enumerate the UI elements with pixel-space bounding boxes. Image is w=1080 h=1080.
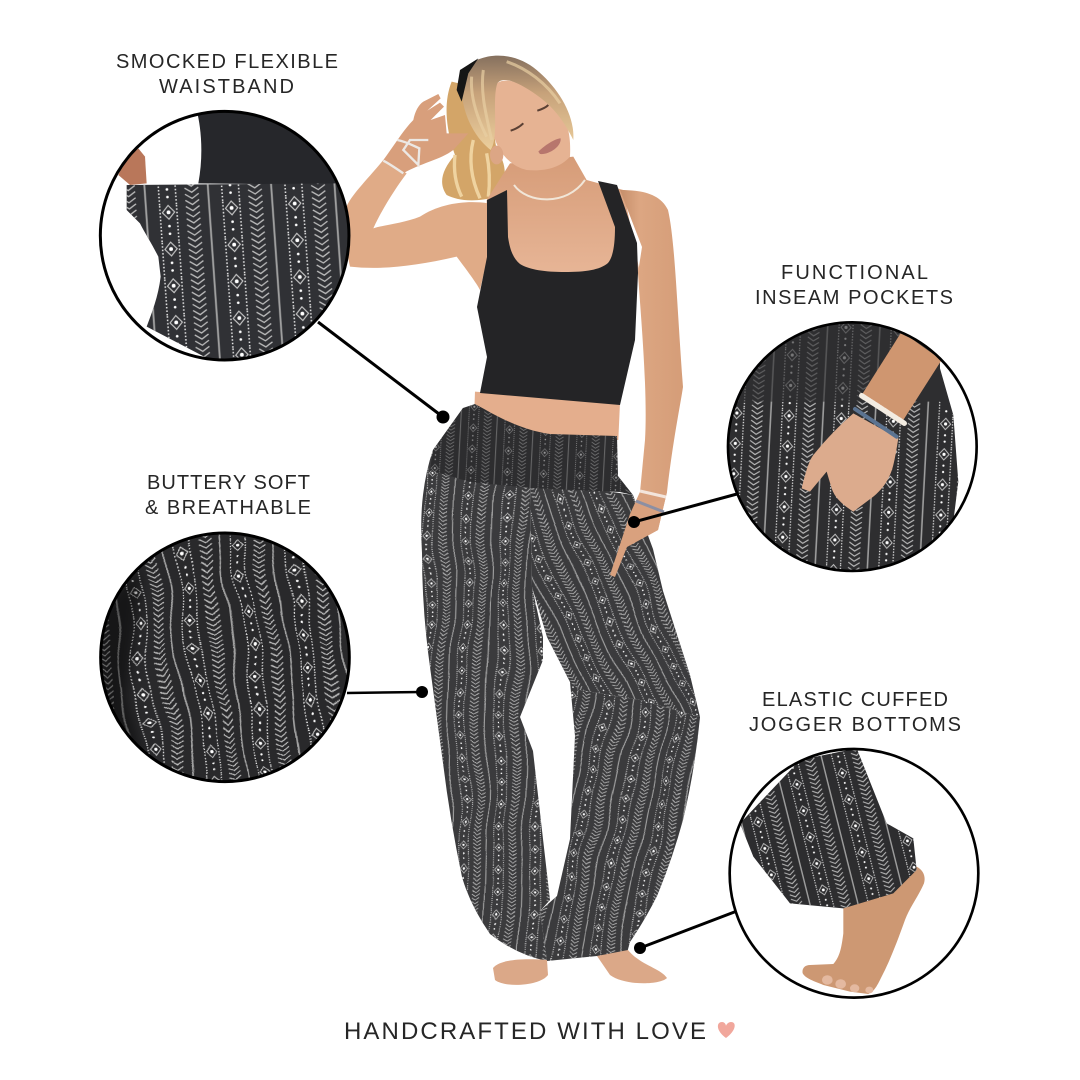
- pants right thigh print: [530, 488, 698, 716]
- cuff fabric print: [740, 748, 917, 908]
- black shirt in detail: [198, 112, 336, 184]
- heading: functional inseam pockets: INSEAM POCKETS: [755, 287, 953, 309]
- smocked waistband: [430, 404, 633, 495]
- hand in pocket: [610, 492, 667, 577]
- forearm: [862, 332, 942, 420]
- heading: elastic cuffed jogger bottoms: [749, 689, 961, 736]
- head: [457, 56, 585, 199]
- circle: waistband detail: [98, 110, 350, 362]
- smocked band print: [738, 324, 900, 402]
- waistband fabric print: [127, 183, 353, 367]
- heading: smocked flexible waistband: [116, 51, 338, 98]
- heading: smocked flexible waistband: SMOCKED FLEXIBLE: [116, 51, 338, 73]
- pants right thigh: [530, 480, 700, 717]
- waistband fabric base: [127, 183, 353, 367]
- pocket fabric print: [729, 402, 958, 570]
- heading: elastic cuffed jogger bottoms: JOGGER BOTTOMS: [749, 714, 961, 736]
- bracelets: [636, 491, 666, 512]
- heading: buttery soft and breathable: & BREATHABLE: [145, 497, 311, 519]
- hand: [802, 413, 898, 512]
- fabric fold shadow: [102, 570, 150, 754]
- heading: buttery soft and breathable: [145, 472, 311, 519]
- heading: elastic cuffed jogger bottoms: ELASTIC CUFFED: [762, 689, 948, 711]
- heading: functional inseam pockets: FUNCTIONAL: [781, 262, 928, 284]
- infographic: [98, 54, 980, 1039]
- pants left leg: [421, 408, 550, 961]
- circle: cuff detail: [728, 748, 980, 999]
- leader line: cuffs: [634, 911, 737, 954]
- right foot: [597, 950, 667, 983]
- leader line: waistband: [318, 322, 450, 424]
- circle: fabric detail: [99, 532, 351, 784]
- left foot: [493, 959, 548, 985]
- circle: pocket detail: [726, 321, 978, 572]
- pants right lower leg: [540, 682, 700, 961]
- footer tagline: HANDCRAFTED WITH LOVE: [344, 1018, 706, 1045]
- cuff fabric base: [740, 748, 917, 908]
- icon: heart: [718, 1022, 735, 1038]
- heading: functional inseam pockets: [755, 262, 953, 309]
- bracelets: [855, 396, 904, 437]
- waistband print: [430, 404, 633, 495]
- toes: [822, 975, 873, 993]
- hair ponytail: [442, 82, 505, 200]
- heading: buttery soft and breathable: BUTTERY SOFT: [147, 472, 310, 494]
- pocket fabric base: [729, 324, 958, 570]
- fingers in detail: [118, 148, 147, 185]
- leader line: fabric: [347, 686, 428, 698]
- model torso and neck: [473, 157, 640, 440]
- pants right lower leg print: [540, 686, 698, 960]
- pants left leg print: [421, 412, 550, 960]
- model raised arm: [346, 94, 490, 290]
- black crop top: [477, 181, 638, 405]
- model figure: [346, 56, 720, 985]
- model right arm: [610, 190, 683, 577]
- heading: smocked flexible waistband: WAISTBAND: [159, 76, 294, 98]
- foot: [802, 867, 925, 994]
- fabric print: [102, 534, 348, 780]
- leader line: pockets: [628, 494, 737, 528]
